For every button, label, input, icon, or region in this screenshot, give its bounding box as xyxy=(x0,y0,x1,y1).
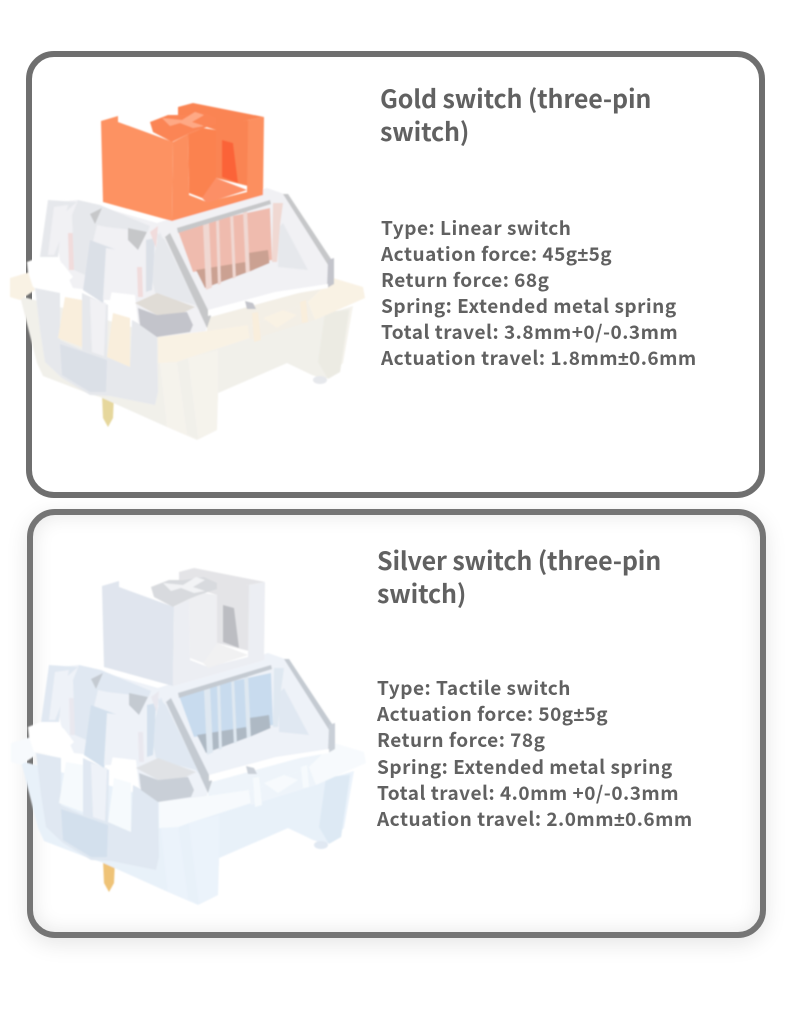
icon: silver switch xyxy=(11,568,366,905)
heading: silver switch: switch) xyxy=(377,575,466,611)
text block: gold switch specifications: Type: Linear switch xyxy=(381,214,571,241)
text block: silver switch specifications: Return force: 78g xyxy=(377,726,545,753)
heading: gold switch xyxy=(380,80,651,149)
text block: silver switch specifications: Spring: Extended metal spring xyxy=(377,753,673,780)
heading: silver switch xyxy=(377,542,661,611)
panel: silver switch card xyxy=(27,509,766,938)
text block: gold switch specifications: Actuation travel: 1.8mm±0.6mm xyxy=(381,344,697,371)
text block: silver switch specifications xyxy=(377,674,693,832)
text block: silver switch specifications: Actuation force: 50g±5g xyxy=(377,700,608,727)
text block: silver switch specifications: Actuation travel: 2.0mm±0.6mm xyxy=(377,805,693,832)
panel: gold switch card xyxy=(26,51,765,498)
text block: silver switch specifications: Total travel: 4.0mm +0/-0.3mm xyxy=(377,779,679,806)
text block: silver switch specifications: Type: Tactile switch xyxy=(377,674,571,701)
text block: gold switch specifications: Total travel: 3.8mm+0/-0.3mm xyxy=(381,318,678,345)
heading: silver switch: Silver switch (three-pin xyxy=(377,542,661,578)
heading: gold switch: Gold switch (three-pin xyxy=(380,80,651,116)
text block: gold switch specifications xyxy=(381,214,697,371)
heading: gold switch: switch) xyxy=(380,113,469,149)
text block: gold switch specifications: Actuation force: 45g±5g xyxy=(381,240,612,267)
text block: gold switch specifications: Spring: Extended metal spring xyxy=(381,292,677,319)
icon: gold switch xyxy=(10,103,365,440)
text block: gold switch specifications: Return force: 68g xyxy=(381,266,549,293)
